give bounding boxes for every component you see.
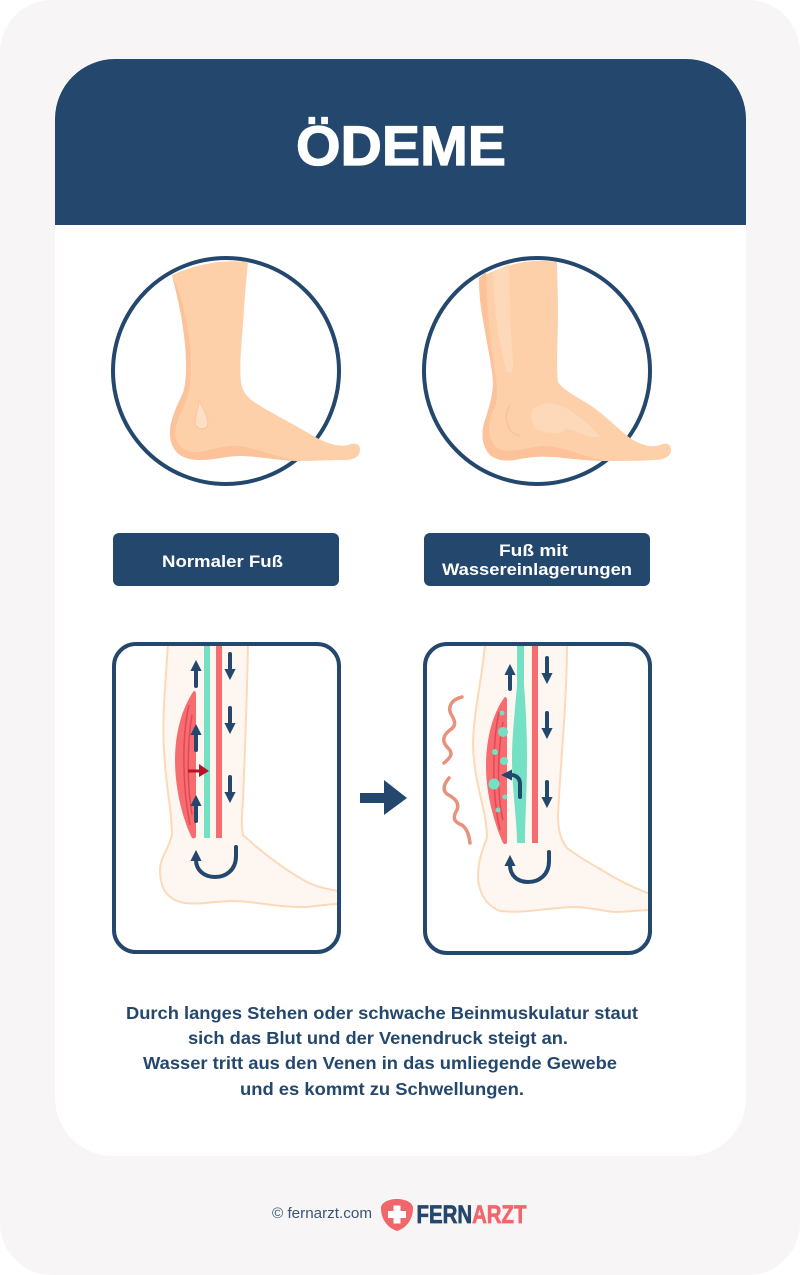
diagram frame bbox=[114, 644, 339, 952]
arrow: transition bbox=[360, 780, 407, 815]
illustration: swollen foot bbox=[424, 258, 671, 484]
explanation text: sich das Blut und der Venendruck steigt an. bbox=[188, 1028, 568, 1048]
header banner bbox=[55, 59, 746, 225]
veins bbox=[512, 645, 527, 843]
diagram frame bbox=[425, 644, 650, 953]
explanation text: Wasser tritt aus den Venen in das umliegende Gewebe bbox=[143, 1053, 617, 1073]
icon: shield logo bbox=[381, 1199, 413, 1231]
flow arrows bbox=[510, 658, 549, 882]
muscle bbox=[175, 691, 196, 838]
illustration: normal foot bbox=[113, 258, 360, 484]
explanation text: Durch langes Stehen oder schwache Beinmuskulatur staut bbox=[126, 1003, 638, 1023]
label: normal foot bbox=[113, 533, 339, 586]
red arrow bbox=[188, 764, 209, 777]
explanation text bbox=[126, 1003, 638, 1099]
muscle bbox=[486, 697, 507, 844]
flow arrows bbox=[196, 654, 236, 877]
panel: swollen leg diagram bbox=[425, 644, 650, 953]
swelling lines bbox=[444, 697, 470, 843]
label: foot with water retention: Fuß mit bbox=[499, 541, 568, 560]
panel: normal leg diagram bbox=[114, 644, 339, 952]
label: foot with water retention: Wassereinlagerungen bbox=[442, 560, 632, 579]
footer: copyright: © fernarzt.com bbox=[272, 1206, 372, 1222]
logo wordmark: FERNARZT bbox=[416, 1201, 526, 1229]
label: foot with water retention bbox=[424, 533, 650, 586]
fluid droplets bbox=[488, 710, 508, 812]
veins bbox=[204, 645, 210, 838]
label: normal foot: Normaler Fuß bbox=[162, 552, 283, 571]
explanation text: und es kommt zu Schwellungen. bbox=[240, 1079, 524, 1099]
panel: main card bbox=[55, 59, 746, 1156]
title: ÖDEME bbox=[296, 114, 506, 177]
